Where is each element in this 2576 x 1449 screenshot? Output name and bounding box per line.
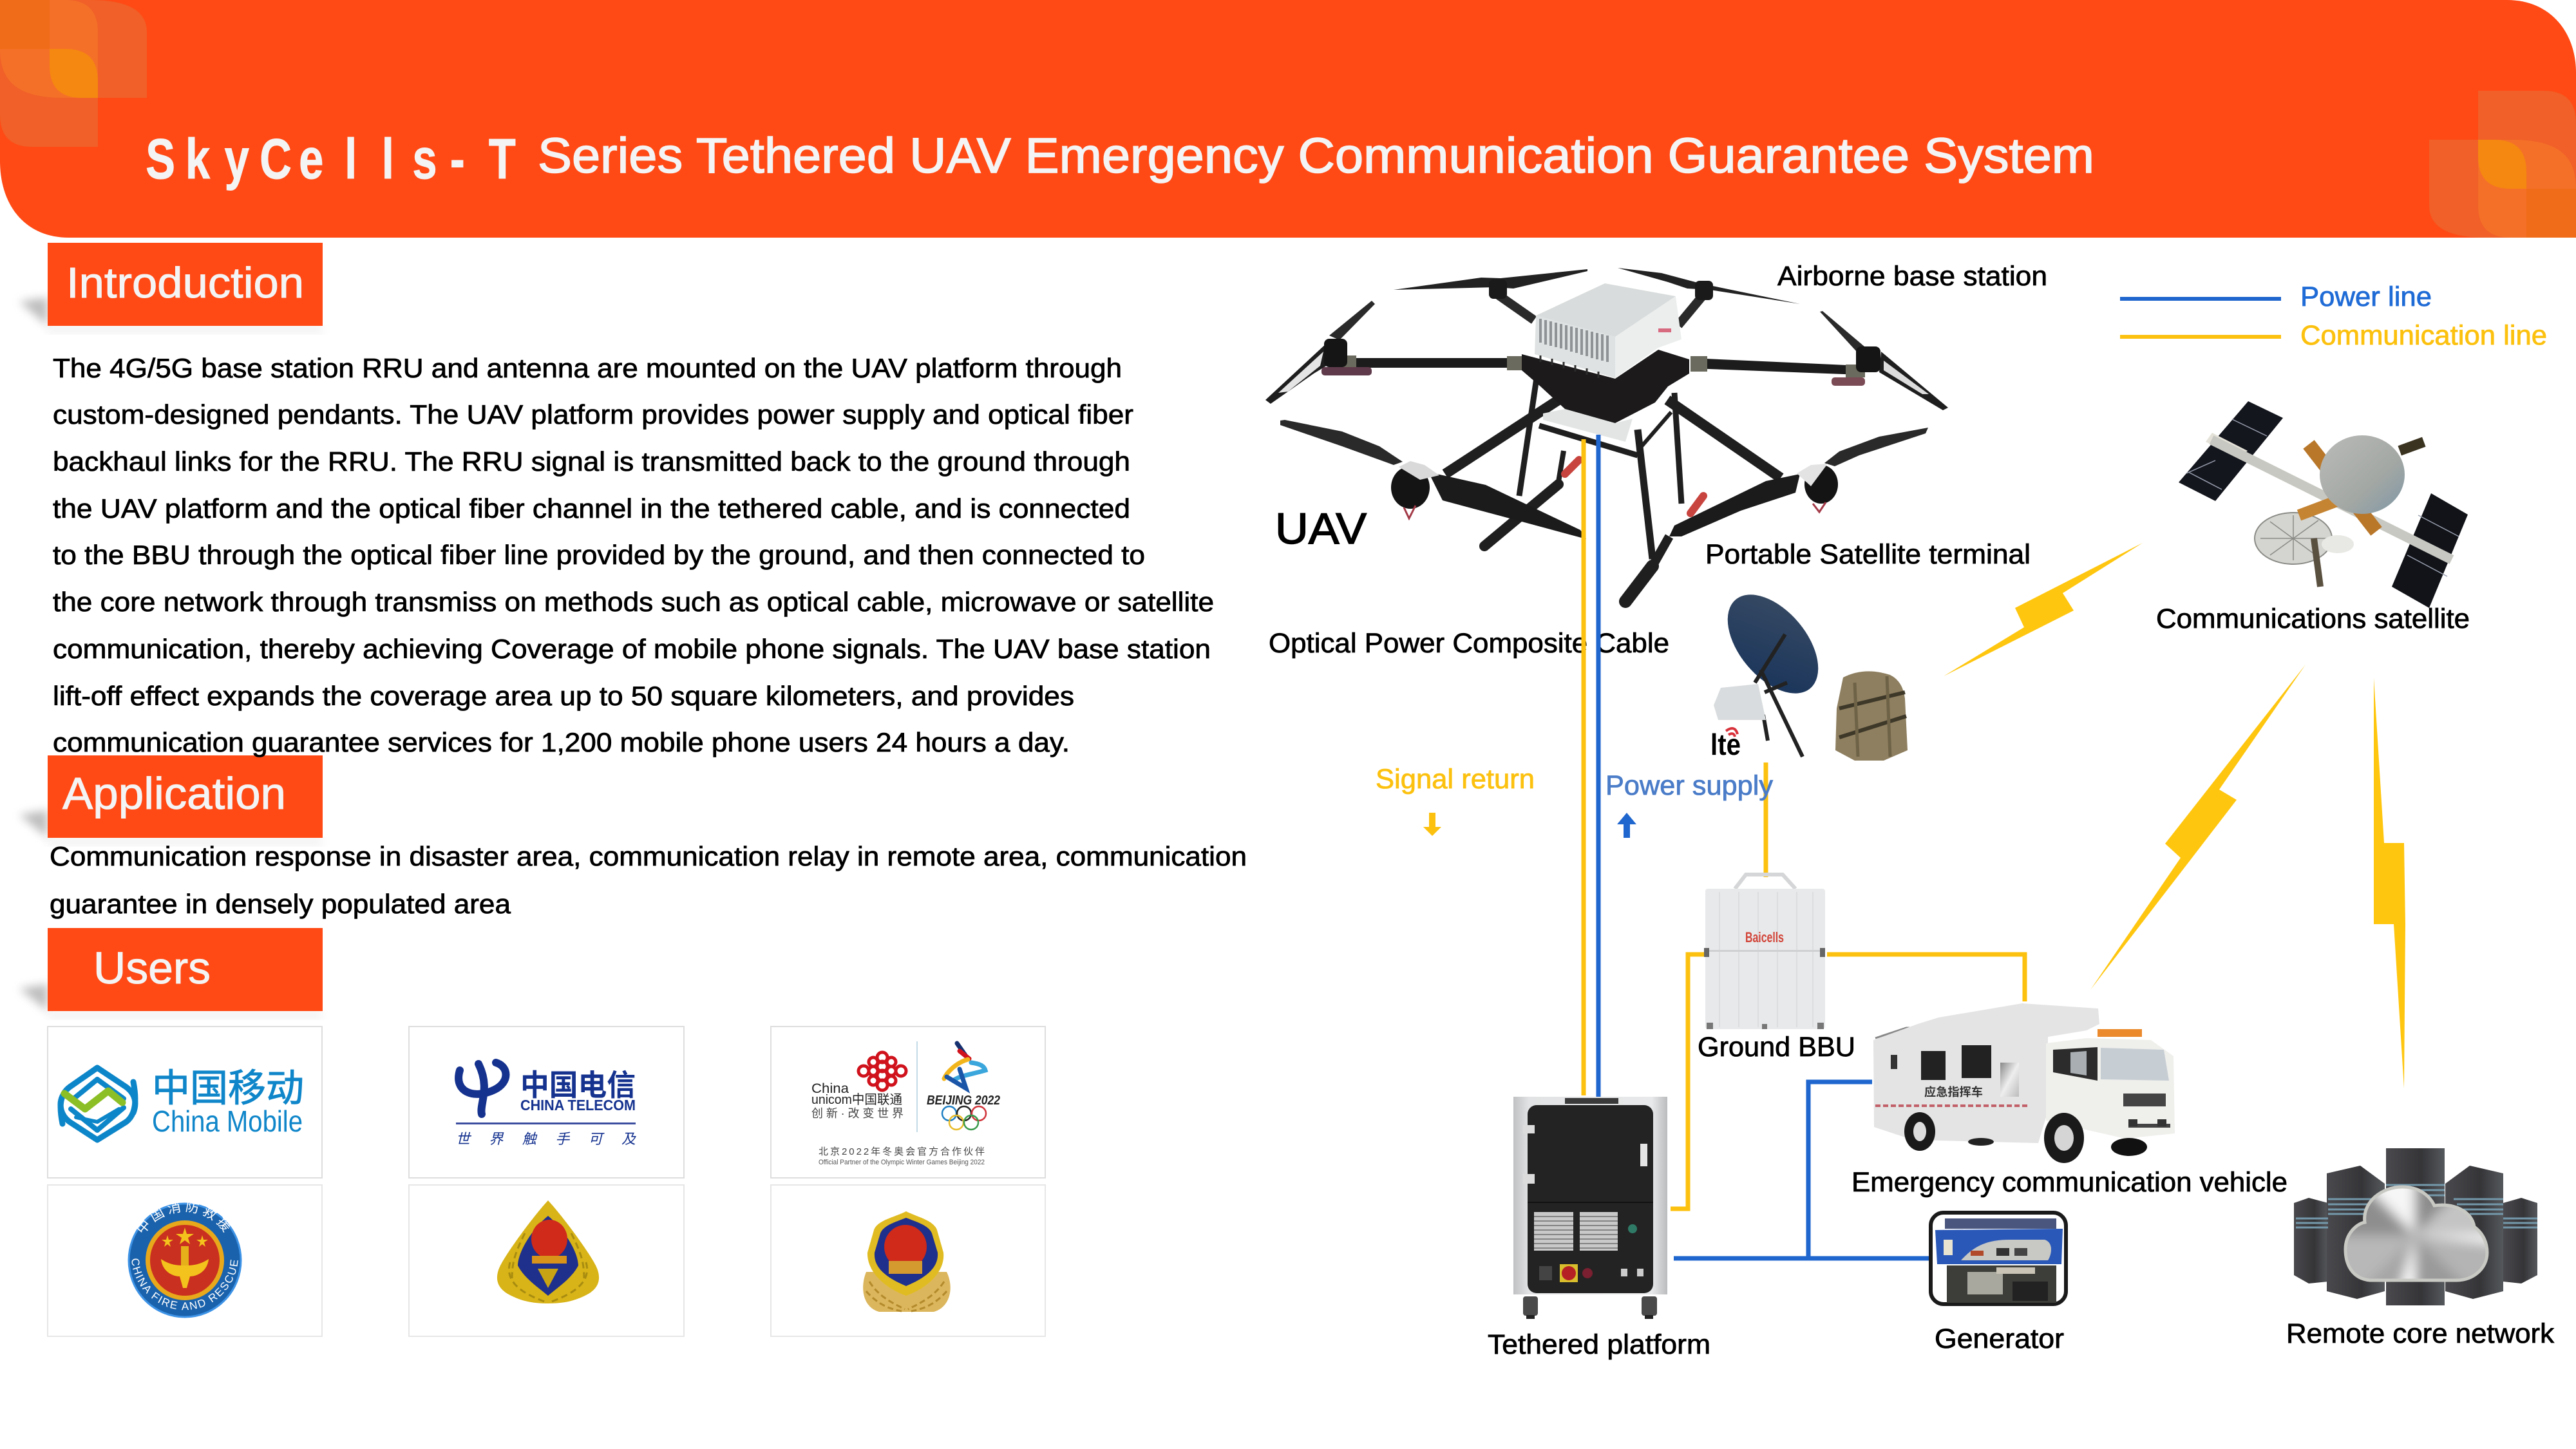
- decoration: top-left overlapping tiles: [0, 0, 147, 147]
- icon: lightning bolt to vehicle: [2090, 665, 2306, 990]
- illustration: emergency communication vehicle: [1873, 1003, 2175, 1163]
- landing legs and struts: [1445, 378, 1781, 601]
- label: Ground BBU: Ground BBU: [1698, 1032, 1855, 1063]
- icon: Beijing 2022 emblem: [944, 1043, 985, 1088]
- label: UAV: UAV: [1275, 504, 1367, 553]
- logo card: China Unicom and Beijing 2022: unicom中国联通: [811, 1092, 902, 1107]
- introduction body text: communication, thereby achieving Coverage of mobile phone signals. The UAV base station: [53, 634, 1211, 664]
- logo card: China Mobile: China Mobile: [152, 1104, 303, 1138]
- introduction body text: backhaul links for the RRU. The RRU signal is transmitted back to the ground through: [53, 446, 1130, 477]
- section heading: Application: Application: [62, 768, 286, 819]
- logo card: China Mobile: 中国移动: [152, 1067, 304, 1110]
- server towers: [2294, 1148, 2537, 1305]
- icon: gold wreath emblem: [497, 1200, 599, 1303]
- application body text: [50, 841, 1247, 919]
- illustration: remote core network cloud: [2294, 1148, 2537, 1305]
- icon: Olympic rings: [942, 1106, 986, 1130]
- top right propeller: [1618, 268, 1800, 325]
- icon: police emblem: [863, 1211, 951, 1312]
- icon: LTE logo: lte: [1710, 728, 1741, 761]
- legend: Power line: [2300, 281, 2432, 312]
- cable: power lines: [1598, 435, 1929, 1258]
- section heading: Application: [19, 755, 323, 844]
- logo card: China Unicom and Beijing 2022: 北京2022年冬奥会官方合作伙伴: [819, 1146, 985, 1157]
- logo card: China Unicom and Beijing 2022: 创新·改变世界: [811, 1107, 904, 1120]
- cable: communication lines: [1584, 439, 2025, 1209]
- icon: backpack: [1835, 671, 1908, 761]
- platform vents: [1534, 1212, 1618, 1251]
- introduction body text: the core network through transmiss on methods such as optical cable, microwave or satellite: [53, 587, 1214, 617]
- title: SkyCells-T: [146, 128, 516, 191]
- logo card: China Unicom and Beijing 2022: China: [811, 1081, 849, 1096]
- decoration: bottom-right overlapping tiles: [2429, 91, 2576, 238]
- illustration: ground BBU: Baicells: [1745, 929, 1784, 945]
- label: Power supply: Power supply: [1605, 770, 1773, 801]
- vehicle wheels: [1904, 1112, 2147, 1163]
- logo card: China Unicom and Beijing 2022: BEIJING 2022: [927, 1094, 1000, 1108]
- platform controls: [1539, 1224, 1643, 1282]
- label: Portable Satellite terminal: Portable Satellite terminal: [1705, 539, 2031, 570]
- illustration: portable satellite terminal: [1710, 578, 1908, 761]
- logo card: China Telecom: 世界触手可及: [456, 1131, 636, 1147]
- label: Generator: Generator: [1935, 1323, 2064, 1354]
- red grips: [1565, 460, 1703, 513]
- right propeller and arm: [1690, 311, 1948, 410]
- front left propeller: [1280, 420, 1586, 539]
- introduction body text: lift-off effect expands the coverage area up to 50 square kilometers, and provides: [53, 681, 1074, 711]
- logo card: China Mobile: [48, 1027, 322, 1178]
- arrow: signal return down: [1423, 813, 1441, 836]
- illustration: tethered platform: [1513, 1097, 1667, 1319]
- application body text: guarantee in densely populated area: [50, 889, 511, 919]
- title: [146, 128, 2094, 191]
- logo card: China Unicom and Beijing 2022: [771, 1027, 1045, 1178]
- legend: [2120, 281, 2547, 351]
- central hub: [1522, 350, 1689, 423]
- introduction body text: communication guarantee services for 1,200 mobile phone users 24 hours a day.: [53, 727, 1070, 757]
- application body text: Communication response in disaster area, communication relay in remote area, communication: [50, 841, 1247, 871]
- section heading: Introduction: [19, 243, 323, 332]
- label: Emergency communication vehicle: Emergency communication vehicle: [1852, 1167, 2287, 1198]
- logo card: China Telecom: [409, 1027, 684, 1178]
- introduction body text: The 4G/5G base station RRU and antenna are mounted on the UAV platform through: [53, 353, 1122, 383]
- label: Remote core network: Remote core network: [2286, 1318, 2555, 1349]
- introduction body text: the UAV platform and the optical fiber channel in the tethered cable, and is connected: [53, 493, 1130, 524]
- icon: lightning bolt to core network: [2374, 678, 2405, 1088]
- introduction body text: to the BBU through the optical fiber line provided by the ground, and then connected to: [53, 540, 1145, 570]
- section heading: Users: Users: [93, 943, 211, 993]
- logo card: police emblem: [771, 1185, 1045, 1336]
- label: Signal return: Signal return: [1376, 764, 1535, 795]
- platform wheels: [1523, 1296, 1657, 1319]
- introduction body text: [53, 353, 1214, 757]
- icon: China Telecom mark: [459, 1063, 506, 1114]
- vehicle windows: [1891, 1045, 2170, 1128]
- label: Tethered platform: Tethered platform: [1488, 1329, 1710, 1360]
- illustration: communications satellite: [2179, 401, 2468, 608]
- section heading: Introduction: Introduction: [66, 259, 304, 307]
- illustration: ground BBU: [1704, 875, 1825, 1029]
- logo card: China Unicom and Beijing 2022: Official Partner of the Olympic Winter Games Beijing 2022: [819, 1159, 985, 1166]
- icon: fire and rescue badge: 中国消防救援: [137, 1203, 231, 1233]
- header banner: [0, 0, 2576, 238]
- airborne base station box: [1535, 283, 1681, 378]
- icon: fire and rescue badge: [128, 1203, 242, 1318]
- illustration: UAV drone: [1265, 268, 1948, 601]
- label: Airborne base station: Airborne base station: [1777, 261, 2047, 292]
- section heading: Users: [19, 928, 323, 1018]
- label: Communications satellite: Communications satellite: [2156, 603, 2470, 634]
- logo card: China Telecom: 中国电信: [520, 1068, 636, 1102]
- top left propeller: [1394, 269, 1587, 320]
- logo card: China Fire and Rescue: [47, 1184, 323, 1337]
- left propeller and arm: [1265, 301, 1526, 404]
- brushed metal cloud: [2344, 1185, 2488, 1282]
- icon: China Unicom knot: [858, 1052, 906, 1090]
- title: Series Tethered UAV Emergency Communication Guarantee System: [538, 128, 2094, 184]
- icon: fire and rescue badge: CHINA FIRE AND RESCUE: [131, 1258, 238, 1310]
- icon: lightning bolt to portable terminal: [1944, 543, 2143, 676]
- illustration: generator: [1931, 1213, 2066, 1304]
- tower light bands: [2296, 1185, 2537, 1227]
- legend: Communication line: [2300, 320, 2547, 351]
- icon: China Mobile knot: [61, 1068, 135, 1140]
- introduction body text: custom-designed pendants. The UAV platform provides power supply and optical fiber: [53, 399, 1133, 430]
- logo card: forest fire emblem: [409, 1185, 684, 1336]
- lower white pod: [1543, 409, 1633, 442]
- label: Optical Power Composite Cable: Optical Power Composite Cable: [1269, 628, 1669, 659]
- illustration: emergency communication vehicle: 应急指挥车: [1924, 1085, 1983, 1099]
- arrow: power supply up: [1617, 813, 1636, 838]
- logo card: China Telecom: CHINA TELECOM: [520, 1097, 636, 1113]
- front right propeller: [1669, 428, 1928, 536]
